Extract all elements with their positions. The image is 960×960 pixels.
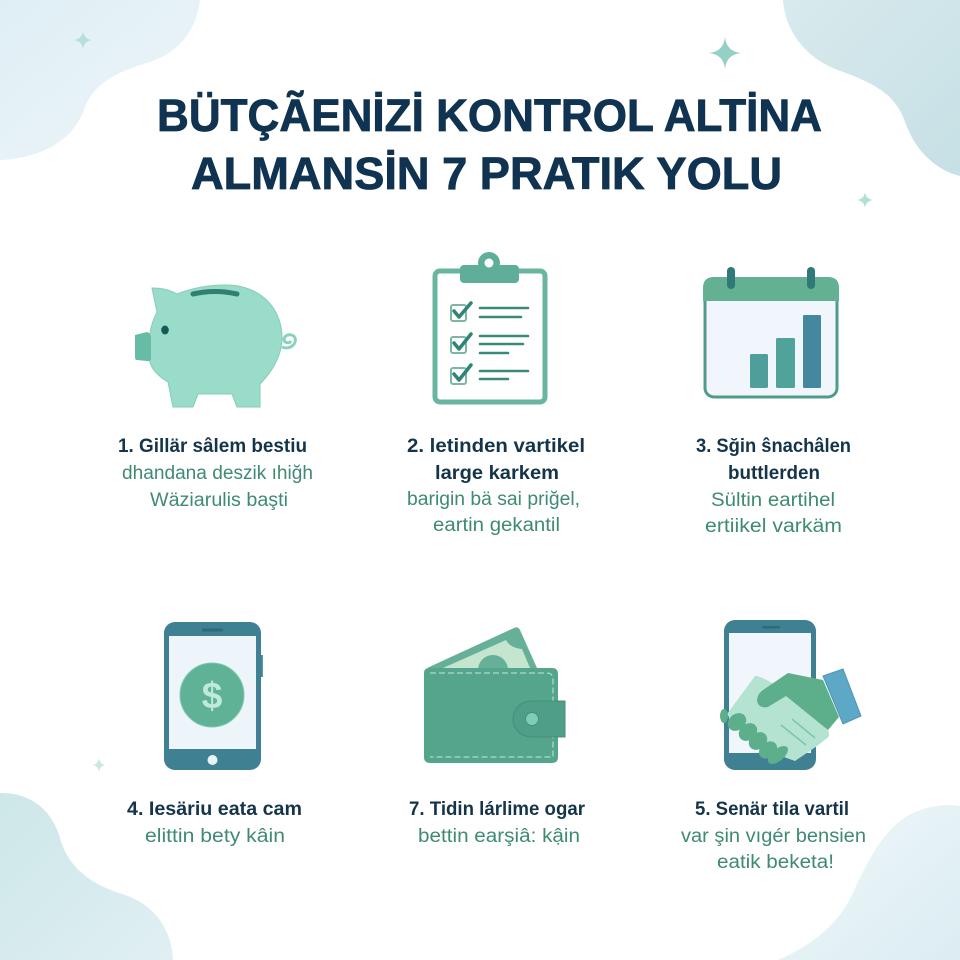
sparkle: lower left [93,758,105,772]
step 5 text: var şin vıgér bensien [681,826,866,847]
step 1 text: dhandana deszik ıhiğh [122,463,313,484]
icon: piggy bank [135,285,295,407]
step 2 text: 2. letinden vartikel [407,436,585,457]
icon: wallet with banknote [424,627,565,763]
step 5 text [681,799,866,873]
step 2 text: barigin bä sai priğel, [407,489,580,510]
step 3 text: ertiikel varkäm [705,516,842,537]
background blob: bottom left [0,793,173,960]
sparkle: right [857,192,873,208]
background blob: top left [0,0,200,160]
background blob: top right [783,0,960,176]
step 5 text: 5. Senär tila vartil [695,799,849,820]
step 7 text [409,799,586,847]
step 3 text: buttlerden [728,463,820,484]
step 1 text: Wäziarulis başti [150,490,288,511]
step 3 text [696,436,851,537]
sparkle: top centre right [709,37,741,69]
title [157,90,822,199]
title: ALMANSİN 7 PRATIK YOLU [191,148,782,199]
step 4 text: 4. Iesäriu eata cam [127,799,302,820]
background blob: bottom right [778,805,960,960]
step 3 text: Sültin eartihel [711,490,835,511]
step 2 text: large karkem [435,463,559,484]
icon: tablet with dollar coin: $ [202,675,223,716]
title: BÜTÇÃENİZİ KONTROL ALTİNA [157,90,822,141]
step 1 text [118,436,313,511]
step 7 text: 7. Tidin lárlime ogar [409,799,586,820]
sparkle: top left [74,31,92,49]
icon: clipboard checklist [435,252,545,402]
step 2 text [407,436,585,536]
step 3 text: 3. Sğin ŝnachâlen [696,436,851,457]
step 5 text: eatik beketa! [717,852,834,873]
step 1 text: 1. Gillär sâlem bestiu [118,436,307,457]
step 4 text [127,799,302,847]
icon: tablet with dollar coin [164,622,263,770]
icon: calendar with bars [703,267,839,397]
step 4 text: elittin bety kâin [145,826,285,847]
step 7 text: bettin earşiâ: kậin [418,826,580,847]
icon: phone with handshake [720,620,861,770]
step 2 text: eartin gekantil [433,515,560,536]
